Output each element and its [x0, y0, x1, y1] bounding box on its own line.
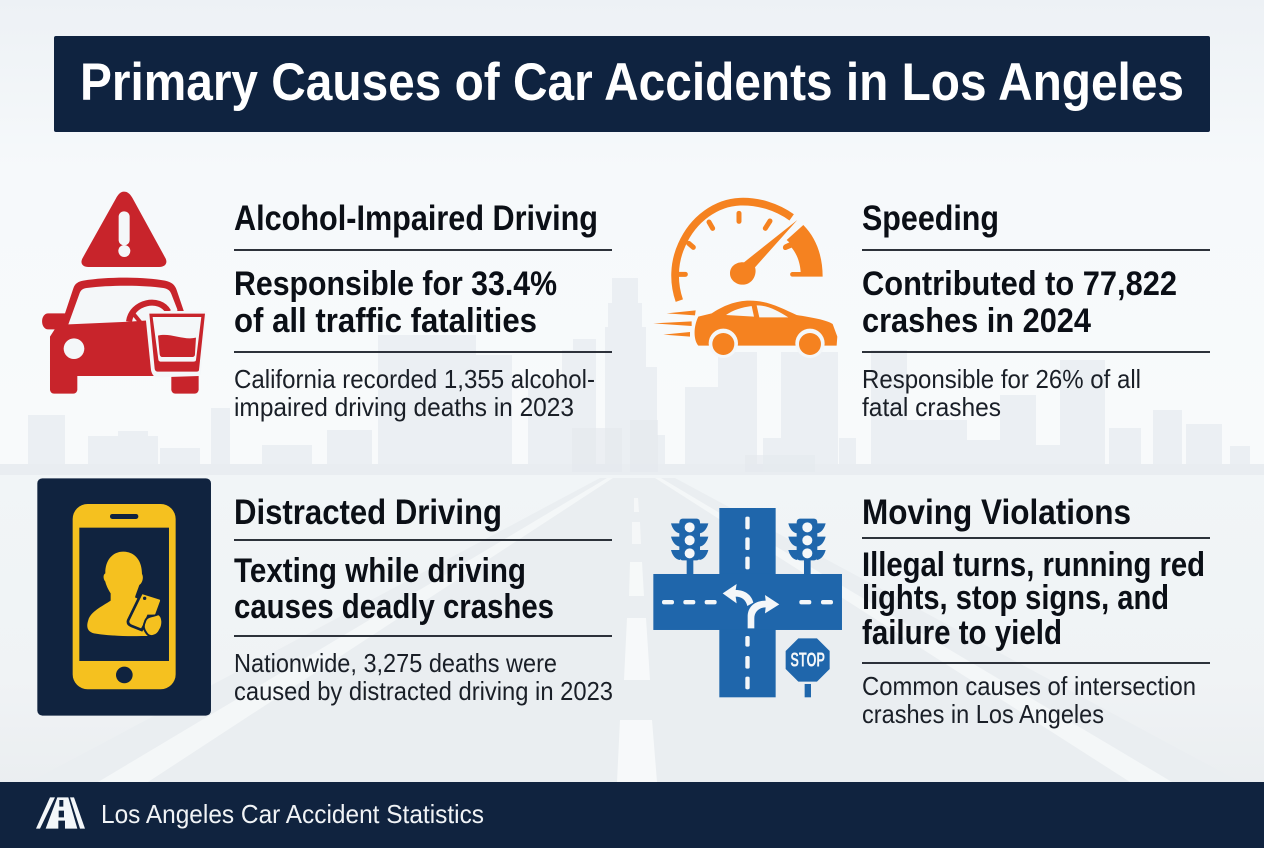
- text block: speeding: crashes in 2024: [862, 302, 1091, 340]
- text block: moving violations: [862, 493, 1210, 729]
- text block: speeding: Speeding: [862, 199, 999, 238]
- icon: intersection with traffic lights and stop sign: [653, 508, 842, 697]
- text block: distracted driving: Nationwide, 3,275 deaths were: [234, 648, 557, 678]
- text block: moving violations: Moving Violations: [862, 493, 1131, 532]
- text block: moving violations: lights, stop signs, and: [862, 579, 1169, 617]
- text block: speeding: [862, 199, 1210, 422]
- text block: alcohol-impaired driving: of all traffic fatalities: [234, 302, 537, 340]
- text block: speeding: Responsible for 26% of all: [862, 364, 1141, 394]
- text block: alcohol-impaired driving: impaired driving deaths in 2023: [234, 392, 574, 422]
- text block: alcohol-impaired driving: Responsible for 33.4%: [234, 265, 557, 303]
- text block: distracted driving: caused by distracted driving in 2023: [234, 676, 613, 706]
- text block: speeding: fatal crashes: [862, 392, 1001, 422]
- text block: moving violations: Common causes of intersection: [862, 671, 1196, 701]
- text block: alcohol-impaired driving: [234, 199, 612, 422]
- text block: distracted driving: Texting while driving: [234, 552, 526, 590]
- icon: road: [36, 797, 85, 829]
- text block: distracted driving: [234, 493, 613, 706]
- icon: alcohol warning and car: [42, 192, 207, 394]
- text block: distracted driving: Distracted Driving: [234, 493, 502, 532]
- icon: intersection with traffic lights and stop sign: STOP: [790, 650, 825, 672]
- footer bar: [0, 782, 1264, 848]
- text block: moving violations: Illegal turns, running red: [862, 546, 1205, 584]
- icon: phone with person texting: [37, 478, 211, 716]
- text block: moving violations: failure to yield: [862, 614, 1062, 652]
- text block: alcohol-impaired driving: Alcohol-Impaired Driving: [234, 199, 598, 238]
- text block: moving violations: crashes in Los Angeles: [862, 699, 1104, 729]
- text block: speeding: Contributed to 77,822: [862, 265, 1177, 303]
- text block: distracted driving: causes deadly crashes: [234, 588, 554, 626]
- text block: alcohol-impaired driving: California recorded 1,355 alcohol-: [234, 364, 595, 394]
- icon: speedometer and car: [653, 202, 837, 358]
- title banner: [54, 36, 1210, 132]
- footer bar: Los Angeles Car Accident Statistics: [101, 799, 484, 829]
